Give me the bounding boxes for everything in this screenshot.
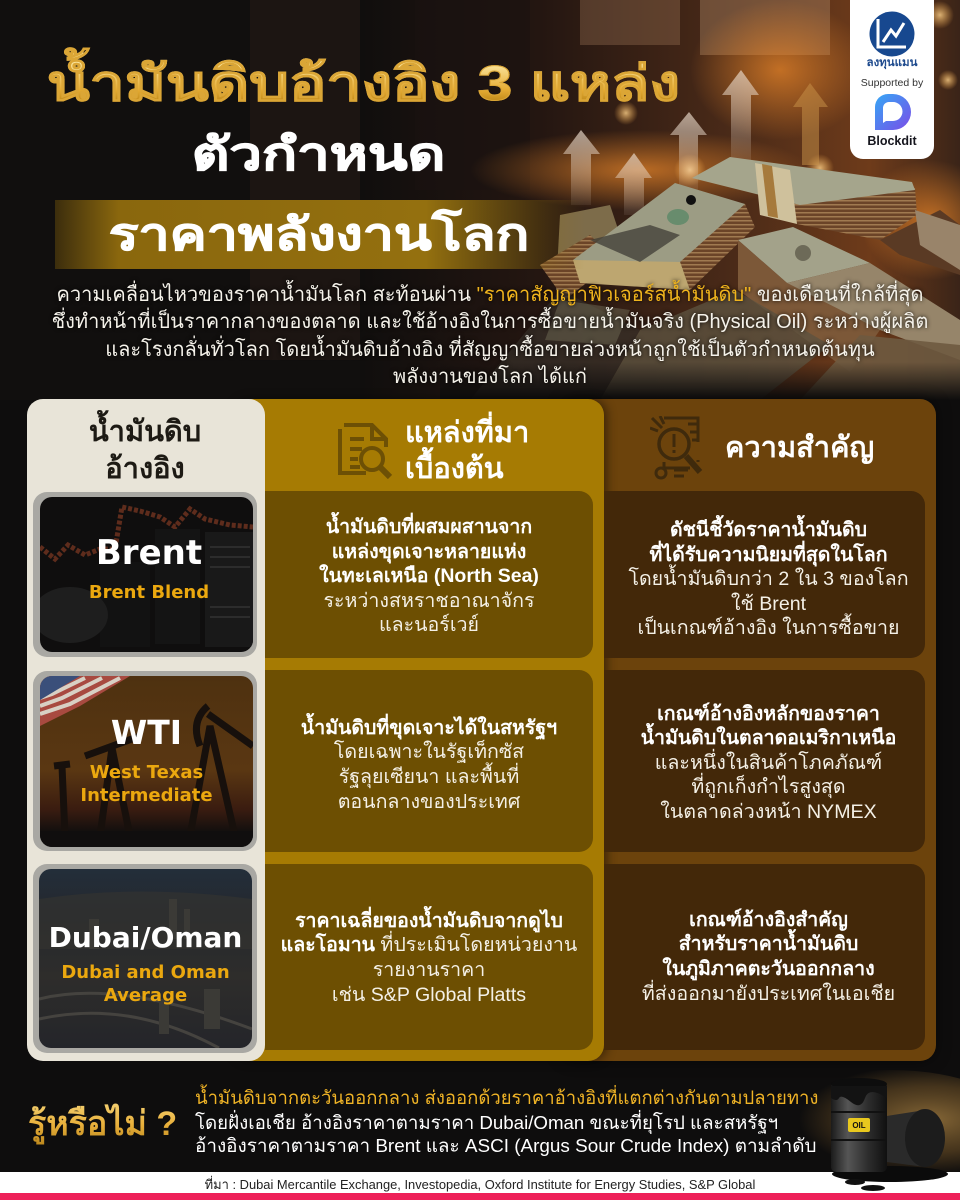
cell: Dubai origin: และโอมาน ที่ประเมินโดยหน่วยงาน (281, 934, 577, 956)
heading: น้ำมันดิบอ้างอิง: อ้างอิง (105, 453, 185, 485)
cell: Brent origin: แหล่งขุดเจาะหลายแห่ง (332, 541, 526, 563)
icon: warning magnifier (650, 416, 702, 480)
title banner (55, 200, 585, 269)
card title: WTI: WTI (111, 713, 182, 752)
did you know text (195, 1084, 818, 1157)
heading: แหล่งที่มา เบื้องต้น (405, 412, 529, 485)
cell: Brent origin: ระหว่างสหราชอาณาจักร (323, 590, 535, 612)
cell: WTI importance: ที่ถูกเก็งกำไรสูงสุด (691, 776, 846, 798)
panel: origin column (230, 399, 604, 1061)
intro paragraph: ชึ่งทำหน้าที่เป็นราคากลางของตลาด และใช้อ้างอิงในการซื้อขายน้ำมันจริง (Physical Oil) ระหว่างผู้ผลิต (52, 311, 928, 333)
icon: ลงทุนแมน logo (870, 12, 914, 56)
cell: Brent origin: และนอร์เวย์ (379, 614, 479, 636)
card title: Dubai/Oman: Dubai/Oman (49, 921, 242, 954)
cell: WTI importance (604, 670, 925, 852)
card subtitle: Brent Blend: Brent Blend (89, 582, 209, 603)
supported by: Supported by (861, 77, 923, 89)
cell: Brent origin: น้ำมันดิบที่ผสมผสานจาก (326, 516, 532, 538)
cell: Brent importance: ที่ได้รับความนิยมที่สุดในโลก (649, 544, 888, 566)
candlestick chart and barrels (40, 504, 253, 647)
bottom oil-swirl background (806, 1070, 960, 1170)
source strip (0, 1172, 960, 1193)
cell: Brent importance: เป็นเกณฑ์อ้างอิง ในการซื้อขาย (638, 617, 899, 639)
card subtitle: West Texas Intermediate (80, 762, 213, 806)
cell: Dubai origin: ราคาเฉลี่ยของน้ำมันดิบจากดูไบ (295, 910, 563, 932)
cell: WTI origin: โดยเฉพาะในรัฐเท็กซัส (334, 741, 524, 763)
cell: Dubai importance: ที่ส่งออกมายังประเทศในเอเชีย (642, 983, 895, 1005)
background photo: industrial glow and banknotes (250, 0, 960, 399)
heading: น้ำมันดิบอ้างอิง: น้ำมันดิบ (89, 416, 201, 448)
card: Brent (33, 492, 257, 657)
cell: Dubai origin (265, 864, 593, 1050)
card subtitle: Dubai and Oman Average: Average (104, 985, 187, 1006)
cell: WTI importance: และหนึ่งในสินค้าโภคภัณฑ์ (655, 752, 882, 774)
cell: WTI origin (265, 670, 593, 852)
title line 2: ตัวกำหนด (192, 129, 445, 180)
cell: Dubai origin: เช่น S&P Global Platts (332, 984, 526, 1006)
source text: ที่มา : Dubai Mercantile Exchange, Investopedia, Oxford Institute for Energy Studies, S&P Global (205, 1177, 755, 1192)
cell: Dubai importance: ในภูมิภาคตะวันออกกลาง (662, 958, 875, 980)
intro paragraph: พลังงานของโลก ได้แก่ (393, 366, 587, 388)
cell: WTI importance: ในตลาดล่วงหน้า NYMEX (660, 801, 877, 823)
did you know text: น้ำมันดิบจากตะวันออกกลาง ส่งออกด้วยราคาอ้างอิงที่แตกต่างกันตามปลายทาง (195, 1087, 818, 1108)
rising arrows (563, 70, 828, 215)
card subtitle: West Texas Intermediate: Intermediate (80, 785, 213, 806)
icon: oil barrels (831, 1078, 948, 1191)
intro paragraph: และโรงกลั่นทั่วโลก โดยน้ำมันดิบอ้างอิง ที่สัญญาซื้อขายล่วงหน้าถูกใช้เป็นตัวกำหนดต้นทุน (105, 339, 875, 361)
heading: น้ำมันดิบอ้างอิง (89, 410, 201, 485)
card: WTI (33, 671, 257, 851)
panel: benchmark column (27, 399, 265, 1061)
card image: city aerial (39, 869, 252, 1048)
banner text: ราคาพลังงานโลก (109, 210, 529, 259)
cell: Brent importance: โดยน้ำมันดิบกว่า 2 ใน 3 ของโลก (628, 568, 909, 590)
cell: Brent importance (604, 491, 925, 658)
icon: Blockdit logo (875, 94, 911, 130)
did you know heading: รู้หรือไม่ ? (28, 1105, 177, 1143)
cell: Brent importance: ใช้ Brent (731, 593, 806, 615)
intro paragraph (52, 278, 930, 388)
cell: WTI origin: ตอนกลางของประเทศ (338, 791, 520, 813)
cell: Brent origin: ในทะเลเหนือ (North Sea) (319, 565, 539, 587)
cell: WTI importance: เกณฑ์อ้างอิงหลักของราคา (657, 703, 880, 725)
card subtitle: West Texas Intermediate: West Texas (90, 762, 203, 783)
cell: Dubai importance (604, 864, 925, 1050)
banknote stacks (470, 157, 960, 400)
icon: oil barrels: OIL (852, 1121, 866, 1130)
did you know text: โดยฝั่งเอเชีย อ้างอิงราคาตามราคา Dubai/Oman ขณะที่ยุโรป และสหรัฐฯ (195, 1112, 778, 1132)
cell: Brent origin (265, 491, 593, 658)
cell: WTI origin: น้ำมันดิบที่ขุดเจาะได้ในสหรัฐฯ (301, 717, 557, 739)
heading: แหล่งที่มา เบื้องต้น: เบื้องต้น (405, 453, 504, 485)
did you know heading (28, 1094, 177, 1154)
skyline texture (39, 892, 252, 1048)
logo badge (850, 0, 934, 159)
bottom accent bar (0, 1193, 960, 1200)
brand name: ลงทุนแมน (867, 57, 917, 69)
did you know text: อ้างอิงราคาตามราคา Brent และ ASCI (Argus Sour Crude Index) ตามลำดับ (195, 1136, 816, 1157)
cell: Brent importance: ดัชนีชี้วัดราคาน้ำมันดิบ (670, 519, 867, 541)
card: Dubai/Oman (33, 864, 257, 1053)
cell: Dubai importance: สำหรับราคาน้ำมันดิบ (679, 933, 858, 955)
card image: barrels and chart (40, 497, 253, 652)
Blockdit wordmark: Blockdit (867, 134, 917, 148)
heading: แหล่งที่มา เบื้องต้น: แหล่งที่มา (405, 417, 529, 449)
cell: Dubai importance: เกณฑ์อ้างอิงสำคัญ (689, 909, 848, 931)
cell: Dubai origin: รายงานราคา (373, 959, 485, 981)
panel: importance column (560, 399, 936, 1061)
title line 1: น้ำมันดิบอ้างอิง 3 แหล่ง (47, 56, 680, 111)
cell: WTI importance: น้ำมันดิบในตลาดอเมริกาเหนือ (641, 727, 896, 749)
card title: Brent: Brent (96, 533, 202, 573)
card subtitle: Dubai and Oman Average (61, 962, 230, 1006)
card subtitle: Dubai and Oman Average: Dubai and Oman (61, 962, 230, 983)
intro paragraph: ความเคลื่อนไหวของราคาน้ำมันโลก สะท้อนผ่าน "ราคาสัญญาฟิวเจอร์สน้ำมันดิบ" ของเดือนที่ใกล้ที่สุด (56, 284, 923, 306)
heading: ความสำคัญ: ความสำคัญ (725, 432, 874, 464)
card image: pumpjacks and flag (40, 676, 253, 847)
icon: document magnifier (338, 423, 392, 479)
cell: WTI origin: รัฐลุยเซียนา และพื้นที่ (339, 766, 519, 788)
flag and pumpjack silhouettes (40, 676, 253, 847)
